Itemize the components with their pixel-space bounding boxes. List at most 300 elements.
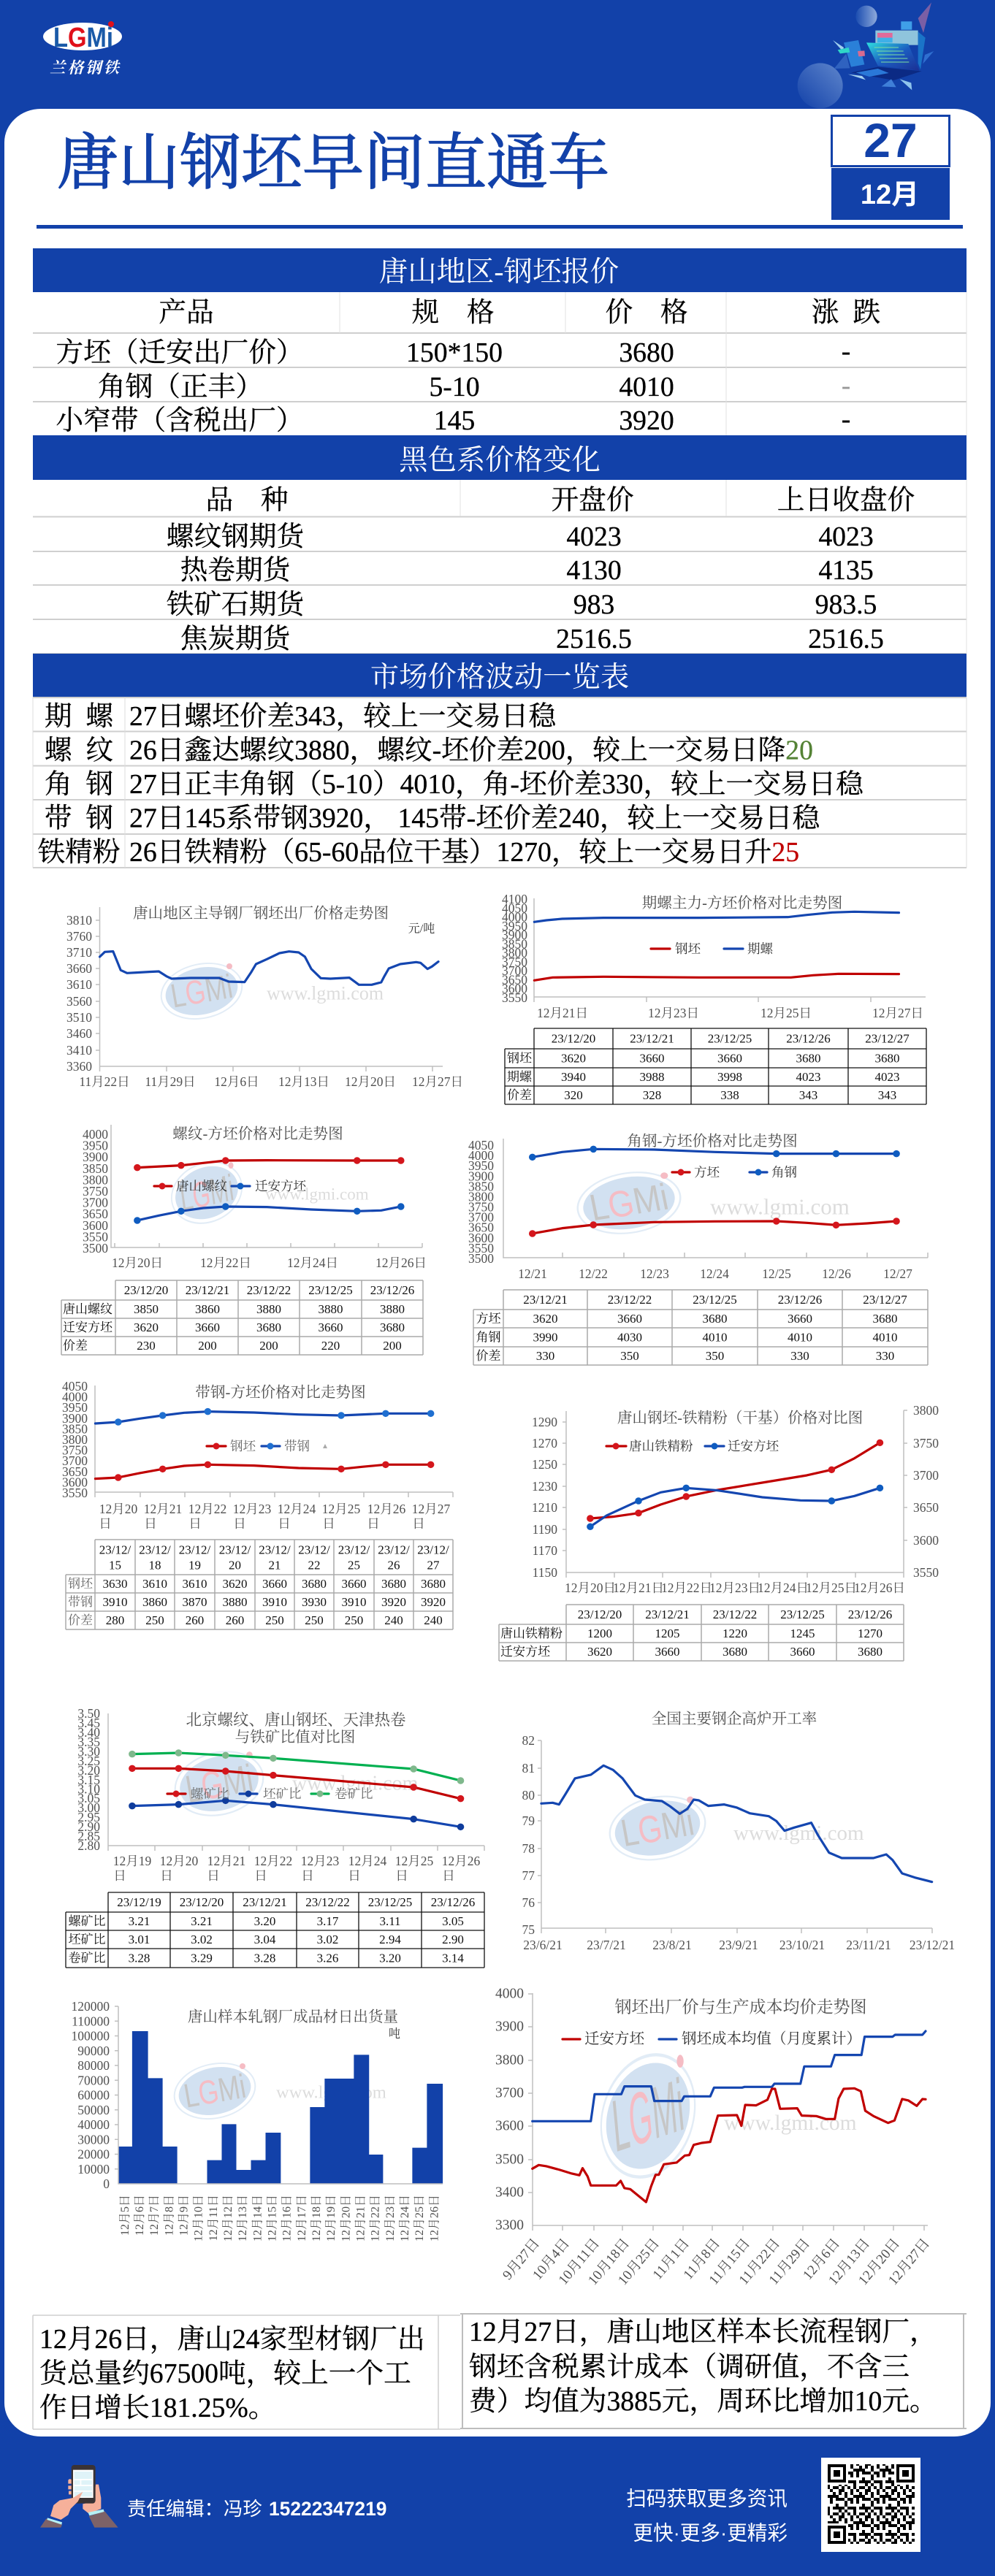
chart: 期螺主力-方坯价格对比走势图: 4050 [502, 901, 527, 915]
table: 带钢方坯数据: 3930 [302, 1595, 327, 1609]
chart: 唐山样本轧钢厂成品材日出货量: 12月8日 [162, 2195, 175, 2236]
chart: 螺纹-方坯价格对比走势图: 3600 [83, 1218, 108, 1233]
chart: 螺纹-方坯价格对比走势图: 3900 [83, 1150, 108, 1164]
chart: 唐山样本轧钢厂成品材日出货量: 唐山样本轧钢厂成品材日出货量 [188, 2009, 398, 2025]
chart: 唐山钢坯-铁精粉（干基）价格对比图 [532, 1403, 939, 1595]
chart: 带钢-方坯价格对比走势图: 3600 [62, 1475, 88, 1489]
chart: 比值对比图: 3.15 [77, 1773, 100, 1787]
panel: 钢坯报价 table: - [842, 336, 850, 367]
chart: 钢坯出厂价与生产成本均价走势图: 3500 [495, 2152, 524, 2168]
table: 角钢方坯数据: 330 [536, 1349, 554, 1363]
panel: 钢坯报价 table: 4010 [619, 372, 674, 402]
table: 螺纹方坯数据: 200 [198, 1339, 217, 1353]
chart: 角钢-方坯价格对比走势图 [468, 1133, 928, 1281]
table: 螺纹方坯数据: 230 [137, 1339, 156, 1353]
chart: 唐山钢坯-铁精粉（干基）价格对比图: 1290 [532, 1415, 557, 1429]
chart: 钢坯出厂价与生产成本均价走势图: 3600 [495, 2118, 524, 2134]
chart: 唐山地区主导钢厂钢坯出厂价格走势图: 11月22日 [79, 1074, 130, 1089]
icon: hands holding phone [40, 2465, 118, 2528]
chart: 比值对比图: 12月23 [301, 1854, 339, 1868]
chart: 唐山钢坯-铁精粉（干基）价格对比图: 1150 [533, 1565, 557, 1580]
table: 比值数据: 3.14 [442, 1952, 464, 1965]
panel: 市场价格波动一览表: 27日正丰角钢（5-10）4010，角-坯价差330，较上一交易日稳 [129, 769, 864, 800]
chart: 唐山地区主导钢厂钢坯出厂价格走势图: 12月20日 [345, 1074, 396, 1089]
table: 比值数据: 坯矿比 [69, 1933, 105, 1946]
table: 钢坯铁精粉数据: 1270 [858, 1627, 882, 1640]
chart: 角钢-方坯价格对比走势图: 3650 [468, 1220, 494, 1235]
table: 螺纹方坯数据: 3660 [319, 1321, 343, 1334]
table: 带钢方坯数据: 250 [145, 1613, 164, 1627]
chart: 比值对比图: 日 [442, 1868, 455, 1883]
chart: 比值对比图: 3.25 [77, 1754, 100, 1768]
table: 比值数据: 卷矿比 [69, 1952, 105, 1965]
chart: 螺纹-方坯价格对比走势图: 3800 [83, 1172, 108, 1187]
chart: 唐山钢坯-铁精粉（干基）价格对比图: 3750 [913, 1436, 939, 1451]
chart: 钢坯出厂价与生产成本均价走势图: 10月25日 [615, 2236, 663, 2288]
chart: 唐山钢坯-铁精粉（干基）价格对比图: 唐山铁精粉 [629, 1439, 693, 1453]
chart: 唐山样本轧钢厂成品材日出货量: 12月6日 [133, 2195, 146, 2236]
chart: 角钢-方坯价格对比走势图: 3850 [468, 1179, 494, 1193]
chart: 唐山地区主导钢厂钢坯出厂价格走势图: 3460 [66, 1026, 92, 1041]
chart: 螺纹-方坯价格对比走势图: 3950 [83, 1139, 108, 1153]
chart: 唐山钢坯-铁精粉（干基）价格对比图: 12月23日 [709, 1581, 760, 1595]
chart: 唐山样本轧钢厂成品材日出货量: 12月21日 [354, 2195, 367, 2241]
chart: 唐山地区主导钢厂钢坯出厂价格走势图: 12月27日 [412, 1074, 463, 1089]
chart: 比值对比图: 12月25 [395, 1854, 433, 1868]
chart: 唐山样本轧钢厂成品材日出货量: 100000 [72, 2029, 110, 2044]
chart: 比值对比图: 日 [395, 1868, 408, 1883]
chart: 带钢-方坯价格对比走势图: 3850 [62, 1421, 88, 1436]
table: 角钢方坯数据: 23/12/27 [863, 1293, 907, 1307]
table: 比值数据: 3.20 [379, 1952, 401, 1965]
chart: 唐山样本轧钢厂成品材日出货量: 12月14日 [251, 2195, 264, 2241]
chart: 比值对比图: 日 [207, 1868, 220, 1883]
chart: 角钢-方坯价格对比走势图: 4000 [468, 1148, 494, 1163]
chart: 带钢-方坯价格对比走势图: 日 [233, 1516, 246, 1531]
chart: 带钢-方坯价格对比走势图: 3700 [62, 1453, 88, 1468]
chart: 角钢-方坯价格对比走势图: 12/24 [700, 1266, 729, 1281]
chart: 比值对比图: 3.00 [77, 1800, 100, 1815]
chart: 唐山地区主导钢厂钢坯出厂价格走势图: LGMi [168, 967, 235, 1015]
logo: LGMI 兰格钢铁: 兰格钢铁 [50, 59, 121, 77]
header rule [37, 225, 963, 229]
table: 带钢方坯数据: 18 [149, 1559, 161, 1572]
table: 钢坯铁精粉数据: 23/12/25 [780, 1608, 825, 1621]
chart: 全国主要钢企高炉开工率: 23/9/21 [719, 1938, 758, 1952]
chart: 期螺主力-方坯价格对比走势图: 3650 [502, 972, 527, 987]
panel: 市场价格波动一览表: 期 螺 [45, 701, 114, 732]
chart: 期螺主力-方坯价格对比走势图: 3900 [502, 928, 527, 942]
chart: 唐山样本轧钢厂成品材日出货量: 12月16日 [281, 2195, 294, 2241]
chart: 螺纹-方坯价格对比走势图: 4000 [83, 1127, 108, 1142]
panel: 钢坯报价 table: - [842, 404, 850, 435]
chart: 唐山样本轧钢厂成品材日出货量: 12月7日 [148, 2195, 161, 2236]
chart: 螺纹-方坯价格对比走势图: 螺纹-方坯价格对比走势图 [172, 1125, 343, 1142]
table: 比值数据: 23/12/26 [431, 1895, 475, 1909]
table: 钢坯铁精粉数据: 3660 [655, 1645, 679, 1659]
panel: 钢坯报价 table [33, 248, 967, 436]
table: 期螺方坯数据: 3988 [640, 1070, 665, 1084]
table: 角钢方坯数据: 23/12/22 [608, 1293, 652, 1307]
chart: 唐山地区主导钢厂钢坯出厂价格走势图: 3810 [66, 913, 92, 928]
table: 带钢方坯数据: 23/12/ [99, 1543, 131, 1557]
chart: 唐山样本轧钢厂成品材日出货量: 120000 [72, 1999, 110, 2014]
chart: 钢坯出厂价与生产成本均价走势图: 3300 [495, 2217, 524, 2233]
table: 期螺方坯数据: 320 [564, 1088, 583, 1102]
panel: 市场价格波动一览表: 27日螺坯价差343，较上一交易日稳 [129, 701, 557, 732]
chart: 唐山样本轧钢厂成品材日出货量: 吨 [389, 2027, 400, 2041]
footer: scan prompt: 更快·更多·更精彩 [633, 2521, 788, 2545]
table: 比值数据: 3.05 [442, 1914, 464, 1928]
table: 期螺方坯数据: 328 [643, 1088, 661, 1102]
chart: 钢坯出厂价与生产成本均价走势图: 11月22日 [736, 2236, 783, 2288]
table: 比值数据: 3.02 [317, 1933, 338, 1946]
chart: 唐山样本轧钢厂成品材日出货量: 12月26日 [427, 2195, 441, 2241]
table: 带钢方坯数据: 3660 [342, 1577, 367, 1591]
chart: 唐山样本轧钢厂成品材日出货量: 12月5日 [118, 2195, 131, 2236]
chart: 期螺主力-方坯价格对比走势图: 12月27日 [872, 1006, 923, 1020]
table: 带钢方坯数据: 带钢 [68, 1595, 93, 1609]
chart: 角钢-方坯价格对比走势图: 3550 [468, 1241, 494, 1255]
footer: editor contact [127, 2498, 386, 2520]
panel: 钢坯报价 table: 涨 跌 [812, 297, 880, 328]
chart: 唐山钢坯-铁精粉（干基）价格对比图: 3550 [913, 1565, 939, 1580]
table: 带钢方坯数据: 3680 [381, 1577, 406, 1591]
table: 期螺方坯数据: 23/12/21 [630, 1031, 674, 1046]
chart: 唐山样本轧钢厂成品材日出货量: 12月12日 [221, 2195, 235, 2241]
chart: 螺纹-方坯价格对比走势图: www.lgmi.com [265, 1185, 369, 1204]
title: 唐山钢坯早间直通车 [57, 130, 609, 197]
chart: 唐山样本轧钢厂成品材日出货量: 20000 [77, 2147, 110, 2162]
chart: 带钢-方坯价格对比走势图: 12月25 [322, 1502, 360, 1516]
panel: 钢坯报价 table: - [842, 370, 850, 401]
table: 螺纹方坯数据: 迁安方坯 [63, 1321, 113, 1334]
date box: day [831, 113, 950, 167]
table: 带钢方坯数据: 3920 [421, 1595, 446, 1609]
table: 钢坯铁精粉数据: 23/12/26 [848, 1608, 892, 1621]
chart: 钢坯出厂价与生产成本均价走势图: 11月1日 [650, 2236, 693, 2282]
chart: 比值对比图: 12月22 [254, 1854, 292, 1868]
panel: 市场价格波动一览表: 角 钢 [45, 769, 113, 800]
chart: 比值对比图: 2.85 [77, 1829, 100, 1843]
table: 比值数据: 23/12/25 [368, 1895, 412, 1909]
table: 带钢方坯数据: 240 [424, 1613, 443, 1627]
chart: 比值对比图: 3.05 [77, 1791, 100, 1805]
table: 期螺方坯数据: 3998 [717, 1070, 742, 1084]
table: 比值数据: 23/12/22 [305, 1895, 350, 1909]
table: 角钢方坯数据: 4010 [872, 1331, 897, 1344]
panel: 钢坯报价 table: 5-10 [429, 372, 480, 402]
chart: 带钢-方坯价格对比走势图: 带钢-方坯价格对比走势图 [195, 1384, 366, 1401]
chart: 全国主要钢企高炉开工率: 82 [522, 1733, 535, 1748]
panel: 钢坯报价 table: 唐山地区-钢坯报价 [379, 256, 619, 288]
chart: 唐山样本轧钢厂成品材日出货量: 30000 [77, 2132, 110, 2147]
table: 比值数据: 23/12/19 [117, 1895, 161, 1909]
chart: 螺纹-方坯价格对比走势图: 唐山螺纹 [176, 1179, 227, 1193]
table: 钢坯铁精粉数据: 23/12/21 [645, 1608, 690, 1621]
table: 比值数据: 23/12/21 [243, 1895, 287, 1909]
table: 钢坯铁精粉数据: 1200 [587, 1627, 612, 1640]
chart: 唐山钢坯-铁精粉（干基）价格对比图: 12月25日 [806, 1581, 857, 1595]
chart: 钢坯出厂价与生产成本均价走势图: 钢坯出厂价与生产成本均价走势图 [615, 1998, 866, 2016]
panel: 钢坯报价 table: 3680 [619, 337, 674, 368]
panel: 黑色系价格变化 table: 上日收盘价 [777, 485, 915, 516]
table: 比值数据: 3.02 [191, 1933, 213, 1946]
table: 螺纹方坯数据: 3680 [256, 1321, 281, 1334]
table: 螺纹方坯数据 [61, 1280, 423, 1355]
table: 比值数据: 3.20 [254, 1914, 275, 1928]
chart: 比值对比图: 3.20 [77, 1763, 100, 1778]
table: 期螺方坯数据: 3620 [561, 1052, 586, 1065]
chart: 唐山样本轧钢厂成品材日出货量: 12月18日 [310, 2195, 323, 2241]
chart: 唐山样本轧钢厂成品材日出货量: 12月10日 [192, 2195, 205, 2241]
chart: 唐山样本轧钢厂成品材日出货量: 12月23日 [384, 2195, 397, 2241]
panel: 市场价格波动一览表: 市场价格波动一览表 [370, 661, 629, 693]
chart: 角钢-方坯价格对比走势图: 3900 [468, 1169, 494, 1183]
table: 带钢方坯数据 [66, 1540, 453, 1629]
table: 比值数据: 2.94 [379, 1933, 401, 1946]
chart: 螺纹-方坯价格对比走势图: 3750 [83, 1184, 108, 1199]
table: 期螺方坯数据: 3660 [717, 1052, 742, 1065]
chart: 期螺主力-方坯价格对比走势图: 期螺 [747, 941, 773, 956]
chart: 比值对比图 [77, 1706, 484, 1883]
chart: 钢坯出厂价与生产成本均价走势图: www.lgmi.com [724, 2111, 857, 2135]
table: 角钢方坯数据: 3620 [533, 1312, 558, 1326]
table: 期螺方坯数据: 3680 [875, 1052, 900, 1065]
chart: 全国主要钢企高炉开工率: 全国主要钢企高炉开工率 [652, 1711, 817, 1727]
chart: 唐山样本轧钢厂成品材日出货量: 12月25日 [413, 2195, 426, 2241]
table: 螺纹方坯数据: 3680 [380, 1321, 405, 1334]
chart: 角钢-方坯价格对比走势图: 12/23 [640, 1266, 669, 1281]
panel: 钢坯报价 table: 角钢（正丰） [98, 372, 263, 402]
chart: 钢坯出厂价与生产成本均价走势图: 钢坯成本均值（月度累计） [682, 2030, 861, 2047]
table: 带钢方坯数据: 3920 [381, 1595, 406, 1609]
chart: 唐山钢坯-铁精粉（干基）价格对比图: 12月21日 [613, 1581, 664, 1595]
chart: 带钢-方坯价格对比走势图: 12月23 [233, 1502, 271, 1516]
table: 带钢方坯数据: 3680 [302, 1577, 327, 1591]
table: 螺纹方坯数据: 23/12/21 [186, 1283, 229, 1297]
table: 带钢方坯数据: 19 [188, 1559, 201, 1572]
chart: 唐山地区主导钢厂钢坯出厂价格走势图: 元/吨 [408, 922, 435, 935]
footer: editor contact: 责任编辑：冯珍 [127, 2498, 262, 2520]
chart: 带钢-方坯价格对比走势图: 12月26 [367, 1502, 405, 1516]
table: 带钢方坯数据: 21 [269, 1559, 281, 1572]
chart: 比值对比图: 12月26 [442, 1854, 480, 1868]
table: 带钢方坯数据: 3630 [102, 1577, 127, 1591]
chart: 全国主要钢企高炉开工率: 23/8/21 [652, 1938, 692, 1952]
chart: 期螺主力-方坯价格对比走势图: 3700 [502, 963, 527, 978]
date box: month: 12月 [861, 180, 919, 210]
table: 比值数据: 3.04 [254, 1933, 276, 1946]
chart: 螺纹-方坯价格对比走势图: 3700 [83, 1196, 108, 1210]
text block: 成本说明: 费）均值为3885元，周环比增加10元。 [469, 2386, 937, 2417]
panel: 市场价格波动一览表: 铁精粉 [37, 837, 121, 868]
footer: scan prompt [626, 2488, 788, 2545]
chart: 带钢-方坯价格对比走势图: 3750 [62, 1443, 88, 1458]
chart: 唐山样本轧钢厂成品材日出货量: 40000 [77, 2117, 110, 2132]
table: 期螺方坯数据: 4023 [875, 1070, 900, 1084]
panel: 黑色系价格变化 table: 4023 [566, 521, 622, 552]
chart: 全国主要钢企高炉开工率: www.lgmi.com [733, 1822, 864, 1845]
chart: 唐山钢坯-铁精粉（干基）价格对比图: 1170 [533, 1543, 557, 1558]
chart: 唐山地区主导钢厂钢坯出厂价格走势图: 3410 [66, 1043, 92, 1058]
table: 带钢方坯数据: 23/12/ [298, 1543, 330, 1557]
table: 期螺方坯数据: 期螺 [507, 1070, 533, 1084]
panel: 黑色系价格变化 table [33, 435, 967, 654]
table: 角钢方坯数据: 4010 [703, 1331, 728, 1344]
chart: 螺纹-方坯价格对比走势图: 3650 [83, 1207, 108, 1221]
table: 带钢方坯数据: 3660 [262, 1577, 287, 1591]
chart: 钢坯出厂价与生产成本均价走势图: 11月15日 [706, 2236, 753, 2288]
chart: 唐山样本轧钢厂成品材日出货量: 10000 [77, 2162, 110, 2176]
chart: 带钢-方坯价格对比走势图 [62, 1379, 453, 1531]
chart: 钢坯出厂价与生产成本均价走势图: 10月11日 [556, 2236, 603, 2288]
chart: 唐山样本轧钢厂成品材日出货量 [72, 1999, 443, 2241]
chart: 螺纹-方坯价格对比走势图: 3550 [83, 1229, 108, 1244]
chart: 全国主要钢企高炉开工率: 76 [522, 1895, 535, 1910]
panel: 钢坯报价 table: 产品 [159, 297, 214, 328]
table: 比值数据: 3.28 [129, 1952, 150, 1965]
chart: 角钢-方坯价格对比走势图: LGMi [586, 1177, 672, 1229]
chart: 带钢-方坯价格对比走势图: 钢坯 [230, 1439, 256, 1453]
table: 带钢方坯数据: 3870 [183, 1595, 207, 1609]
table: 比值数据: 螺矿比 [69, 1914, 105, 1928]
panel: 黑色系价格变化 table: 983 [573, 589, 614, 620]
table: 螺纹方坯数据: 23/12/26 [370, 1283, 414, 1297]
panel: 黑色系价格变化 table: 2516.5 [556, 624, 632, 654]
chart: 角钢-方坯价格对比走势图: 12/26 [822, 1266, 851, 1281]
table: 比值数据: 3.01 [129, 1933, 150, 1946]
chart: 期螺主力-方坯价格对比走势图: 期螺主力-方坯价格对比走势图 [642, 895, 842, 911]
table: 角钢方坯数据: 价差 [476, 1349, 501, 1363]
chart: 螺纹-方坯价格对比走势图: 12月24日 [287, 1255, 338, 1270]
chart: 比值对比图: 12月24 [348, 1854, 386, 1868]
chart: 唐山样本轧钢厂成品材日出货量: 0 [103, 2176, 110, 2191]
chart: 唐山钢坯-铁精粉（干基）价格对比图: 12月26日 [854, 1581, 905, 1595]
chart: 带钢-方坯价格对比走势图: 日 [412, 1516, 425, 1531]
text block: 成本说明 [460, 2314, 967, 2428]
chart: 钢坯出厂价与生产成本均价走势图: 3800 [495, 2052, 524, 2068]
panel: 钢坯报价 table: 小窄带（含税出厂） [56, 405, 304, 436]
table: 期螺方坯数据: 23/12/25 [708, 1031, 752, 1046]
panel: 黑色系价格变化 table: 4135 [818, 555, 874, 586]
chart: 唐山样本轧钢厂成品材日出货量: www.lgmi.com [276, 2083, 386, 2102]
chart: 带钢-方坯价格对比走势图: 日 [367, 1516, 380, 1531]
chart: 唐山样本轧钢厂成品材日出货量: 12月19日 [324, 2195, 338, 2241]
chart: 期螺主力-方坯价格对比走势图: 12月21日 [537, 1006, 588, 1020]
chart: 唐山样本轧钢厂成品材日出货量: 12月20日 [339, 2195, 352, 2241]
chart: 期螺主力-方坯价格对比走势图: 3800 [502, 946, 527, 960]
chart: 钢坯出厂价与生产成本均价走势图: 11月29日 [766, 2236, 813, 2288]
chart: 钢坯出厂价与生产成本均价走势图: LGMi [609, 2063, 687, 2168]
footer: editor contact: 15222347219 [269, 2498, 386, 2520]
chart: 螺纹-方坯价格对比走势图: 12月20日 [112, 1255, 163, 1270]
table: 比值数据: 23/12/20 [180, 1895, 224, 1909]
chart: 带钢-方坯价格对比走势图: 4050 [62, 1379, 88, 1394]
chart: 带钢-方坯价格对比走势图: 日 [322, 1516, 335, 1531]
chart: 唐山钢坯-铁精粉（干基）价格对比图: 迁安方坯 [728, 1439, 779, 1453]
panel: 市场价格波动一览表: 27日145系带钢3920， 145带-坯价差240，较上一交易日稳 [129, 803, 821, 834]
table: 角钢方坯数据: 330 [876, 1349, 894, 1363]
chart: 角钢-方坯价格对比走势图: 方坯 [694, 1165, 720, 1180]
chart: 比值对比图: 坯矿比 [263, 1786, 301, 1801]
table: 角钢方坯数据: 4010 [788, 1331, 812, 1344]
table: 角钢方坯数据: 3680 [872, 1312, 897, 1326]
table: 带钢方坯数据: 280 [106, 1613, 124, 1627]
table: 螺纹方坯数据: 23/12/22 [247, 1283, 291, 1297]
chart: 带钢-方坯价格对比走势图: 12月22 [188, 1502, 226, 1516]
chart: 全国主要钢企高炉开工率: 79 [522, 1813, 535, 1828]
chart: 角钢-方坯价格对比走势图: 3700 [468, 1210, 494, 1225]
chart: 螺纹-方坯价格对比走势图: LGMi [178, 1166, 236, 1219]
table: 螺纹方坯数据: 3850 [134, 1302, 159, 1316]
table: 带钢方坯数据: 250 [345, 1613, 363, 1627]
chart: 螺纹-方坯价格对比走势图: 3850 [83, 1161, 108, 1176]
chart: 带钢-方坯价格对比走势图: 12月21 [144, 1502, 182, 1516]
chart: 比值对比图: 12月21 [207, 1854, 245, 1868]
chart: 带钢-方坯价格对比走势图: 日 [188, 1516, 202, 1531]
chart: 带钢-方坯价格对比走势图: 3800 [62, 1432, 88, 1447]
chart: 比值对比图: 2.90 [77, 1819, 100, 1834]
chart: 角钢-方坯价格对比走势图: 12/22 [579, 1266, 608, 1281]
chart: 带钢-方坯价格对比走势图: 12月24 [278, 1502, 316, 1516]
chart: 全国主要钢企高炉开工率: 78 [522, 1841, 535, 1856]
chart: 钢坯出厂价与生产成本均价走势图: 3900 [495, 2019, 524, 2035]
chart: 全国主要钢企高炉开工率: 23/10/21 [779, 1938, 825, 1952]
chart: 比值对比图: 卷矿比 [335, 1786, 373, 1801]
table: 带钢方坯数据: 3680 [421, 1577, 446, 1591]
chart: 钢坯出厂价与生产成本均价走势图: 12月6日 [800, 2236, 843, 2283]
panel: 黑色系价格变化 table: 品 种 [205, 485, 289, 516]
chart: 唐山样本轧钢厂成品材日出货量: 12月15日 [266, 2195, 279, 2241]
table: 带钢方坯数据: 3880 [222, 1595, 247, 1609]
text block: 出货量说明: 作日增长181.25%。 [39, 2393, 275, 2423]
chart: 唐山样本轧钢厂成品材日出货量: 12月9日 [177, 2195, 190, 2236]
chart: 期螺主力-方坯价格对比走势图: 4100 [502, 892, 527, 906]
table: 螺纹方坯数据: 3620 [134, 1321, 159, 1334]
chart: 比值对比图: 日 [160, 1868, 173, 1883]
chart: 角钢-方坯价格对比走势图: 12/21 [518, 1266, 547, 1281]
table: 角钢方坯数据: 23/12/25 [693, 1293, 737, 1307]
chart: 全国主要钢企高炉开工率 [522, 1711, 955, 1952]
table: 带钢方坯数据: 23/12/ [417, 1543, 449, 1557]
chart: 比值对比图: 北京螺纹、唐山钢坯、天津热卷 [186, 1711, 406, 1729]
table: 螺纹方坯数据: 3860 [195, 1302, 220, 1316]
logo: LGMI 兰格钢铁 [43, 21, 122, 77]
table: 带钢方坯数据: 25 [348, 1559, 360, 1572]
text block: 成本说明: 12月27日，唐山地区样本长流程钢厂， [469, 2317, 937, 2347]
panel: 黑色系价格变化 table: 热卷期货 [180, 555, 292, 586]
table: 比值数据: 2.90 [442, 1933, 464, 1946]
table: 带钢方坯数据: 3910 [102, 1595, 127, 1609]
panel: 黑色系价格变化 table: 焦炭期货 [180, 624, 292, 654]
chart: 比值对比图: 2.95 [77, 1810, 100, 1824]
chart: 角钢-方坯价格对比走势图: 12/27 [883, 1266, 912, 1281]
chart: 比值对比图: 12月19 [113, 1854, 151, 1868]
chart: 唐山钢坯-铁精粉（干基）价格对比图: 1230 [532, 1479, 557, 1494]
table: 钢坯铁精粉数据: 1220 [723, 1627, 747, 1640]
panel: 市场价格波动一览表: 螺 纹 [45, 735, 113, 765]
table: 角钢方坯数据: 23/12/26 [778, 1293, 822, 1307]
chart: 期螺主力-方坯价格对比走势图: 4000 [502, 910, 527, 925]
table: 期螺方坯数据: 3940 [561, 1070, 586, 1084]
table: 带钢方坯数据: 3610 [142, 1577, 167, 1591]
chart: 全国主要钢企高炉开工率: 23/11/21 [846, 1938, 891, 1952]
chart: 钢坯出厂价与生产成本均价走势图: 迁安方坯 [584, 2030, 644, 2047]
chart: 唐山钢坯-铁精粉（干基）价格对比图: 唐山钢坯-铁精粉（干基）价格对比图 [617, 1410, 863, 1426]
table: 钢坯铁精粉数据: 唐山铁精粉 [500, 1627, 563, 1640]
panel: 黑色系价格变化 table: 螺纹钢期货 [167, 521, 306, 552]
